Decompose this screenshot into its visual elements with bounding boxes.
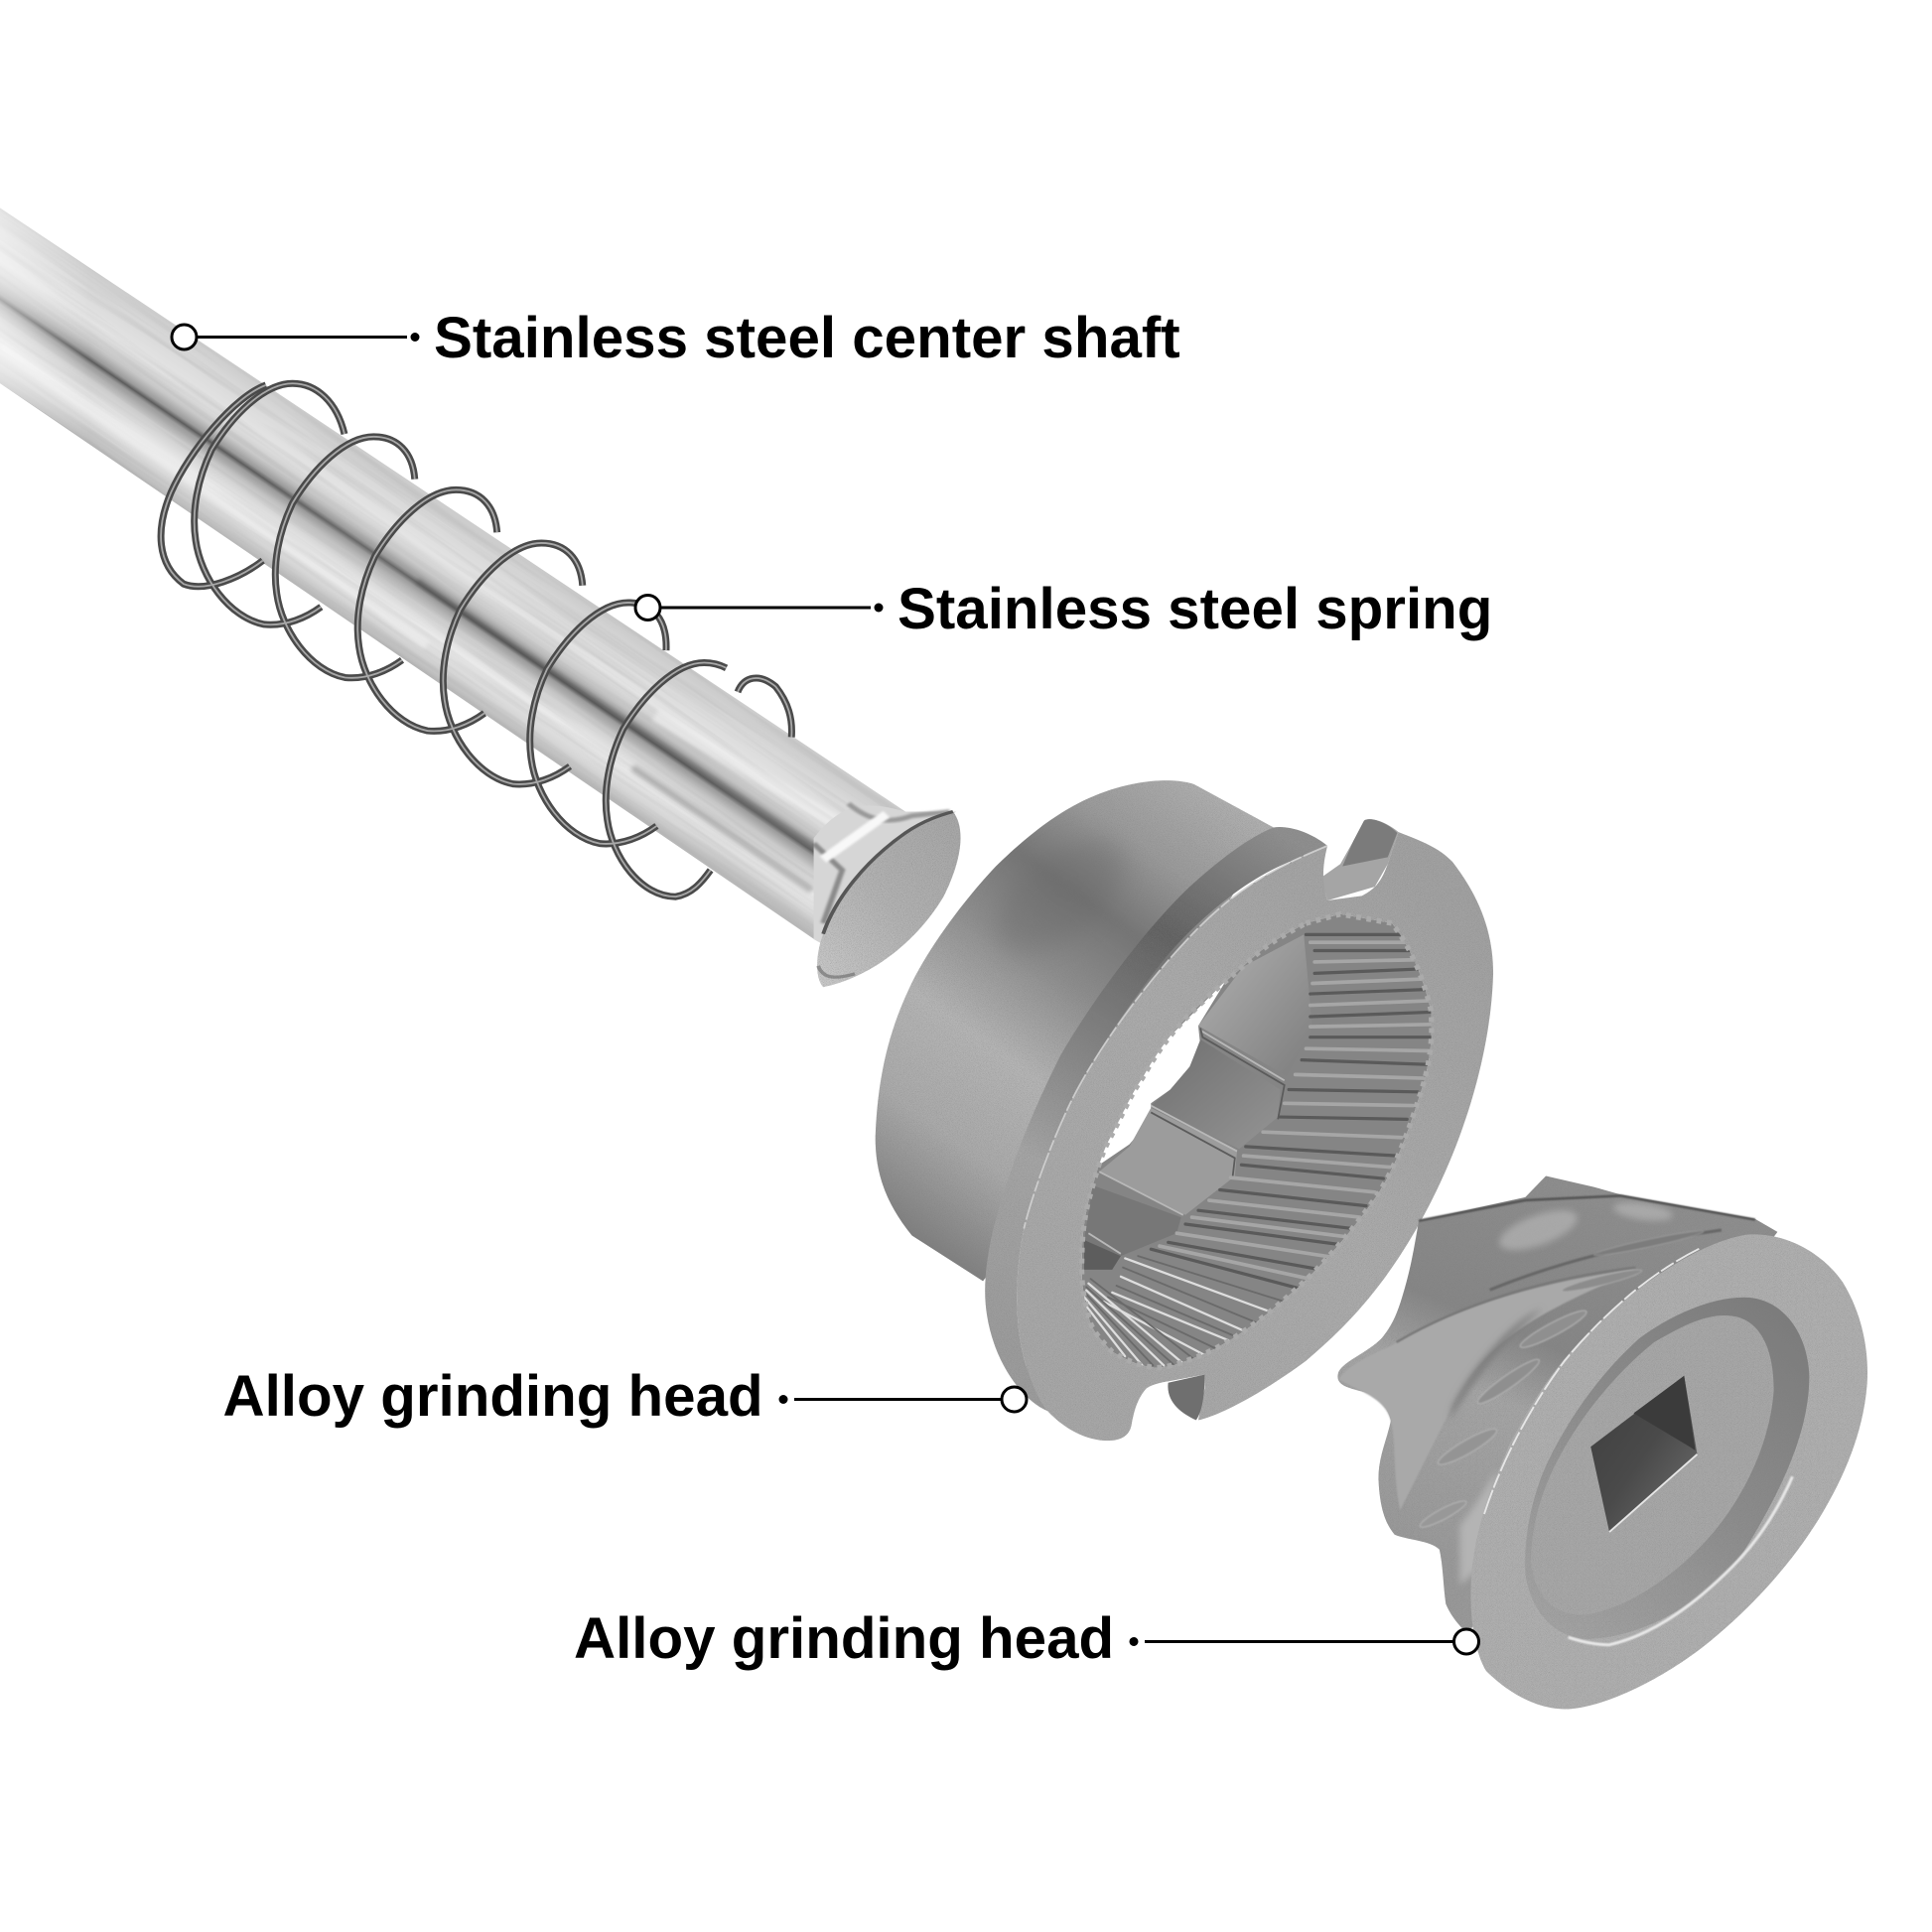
spring coils (161, 383, 791, 897)
face edge highlight (1484, 1249, 1699, 1514)
slot interior (1321, 819, 1399, 900)
head collar (814, 805, 956, 944)
burr front face (1470, 1234, 1867, 1709)
recess outer highlight (1569, 1476, 1792, 1645)
square drive hole (1590, 1376, 1697, 1532)
center shaft (0, 208, 905, 939)
ring burr teeth (1084, 934, 1431, 1365)
recessed ring (1525, 1298, 1809, 1639)
callout: alloy grinding head (burr): Alloy grinding head (574, 1606, 1114, 1671)
ring outer cylinder (876, 780, 1274, 1281)
callout: stainless steel spring (635, 577, 1492, 641)
ring inner hollow (1082, 914, 1432, 1368)
callout: stainless steel spring: Stainless steel spring (897, 577, 1492, 641)
callout: stainless steel center shaft: Stainless steel center shaft (434, 306, 1180, 370)
center boss (1531, 1315, 1774, 1615)
grinding ring (876, 780, 1493, 1441)
serrated bore edge (1082, 914, 1432, 1368)
shadow patch on cylinder (978, 818, 1143, 974)
exploded parts diagram (0, 208, 1867, 1710)
shaft head (814, 803, 961, 987)
callout: alloy grinding head (ring): Alloy grinding head (222, 1364, 763, 1429)
grinding burr (1337, 1175, 1867, 1709)
rim highlight (1024, 846, 1327, 1229)
burr blade highlights and grooves (1338, 1195, 1755, 1586)
see-through opening (1099, 980, 1226, 1165)
shaft body (0, 208, 905, 939)
inner conical steps (1084, 934, 1312, 1270)
callout: alloy grinding head (ring) (222, 1364, 1027, 1429)
fade at left edge (0, 208, 89, 443)
ring front face (1017, 832, 1493, 1441)
callout: alloy grinding head (burr) (574, 1606, 1479, 1671)
head face (817, 811, 961, 987)
burr body (1337, 1175, 1777, 1633)
bottom slot (1168, 1375, 1204, 1420)
ring flange rim (985, 827, 1327, 1411)
shaft surface streaks (26, 291, 892, 925)
